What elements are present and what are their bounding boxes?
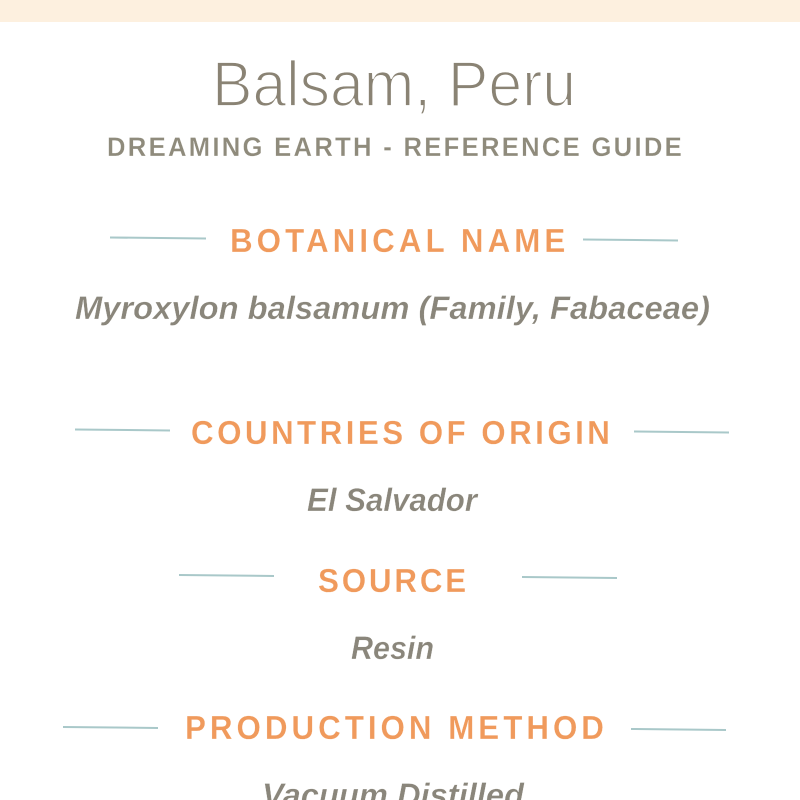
divider right bbox=[631, 729, 726, 730]
divider left bbox=[75, 430, 170, 431]
heading: countries of origin: COUNTRIES OF ORIGIN bbox=[191, 414, 610, 451]
heading: botanical name: BOTANICAL NAME bbox=[230, 222, 565, 259]
botanical name text: Myroxylon balsamum (Family, Fabaceae) bbox=[75, 290, 710, 326]
divider right bbox=[634, 432, 729, 433]
divider right bbox=[583, 240, 678, 241]
divider left bbox=[63, 727, 158, 728]
origin text: El Salvador bbox=[307, 482, 479, 518]
subtitle: DREAMING EARTH - REFERENCE GUIDE bbox=[107, 131, 682, 162]
top banner bbox=[0, 0, 800, 22]
heading: production method: PRODUCTION METHOD bbox=[185, 709, 604, 746]
section: source bbox=[179, 562, 617, 666]
title: Balsam, Peru bbox=[212, 48, 576, 120]
section: countries of origin bbox=[75, 414, 729, 518]
source text: Resin bbox=[351, 630, 434, 666]
divider right bbox=[522, 577, 617, 578]
divider left bbox=[179, 575, 274, 576]
heading: source: SOURCE bbox=[318, 562, 466, 599]
section: botanical name bbox=[75, 222, 710, 326]
divider left bbox=[110, 238, 206, 239]
section: production method bbox=[63, 709, 726, 800]
